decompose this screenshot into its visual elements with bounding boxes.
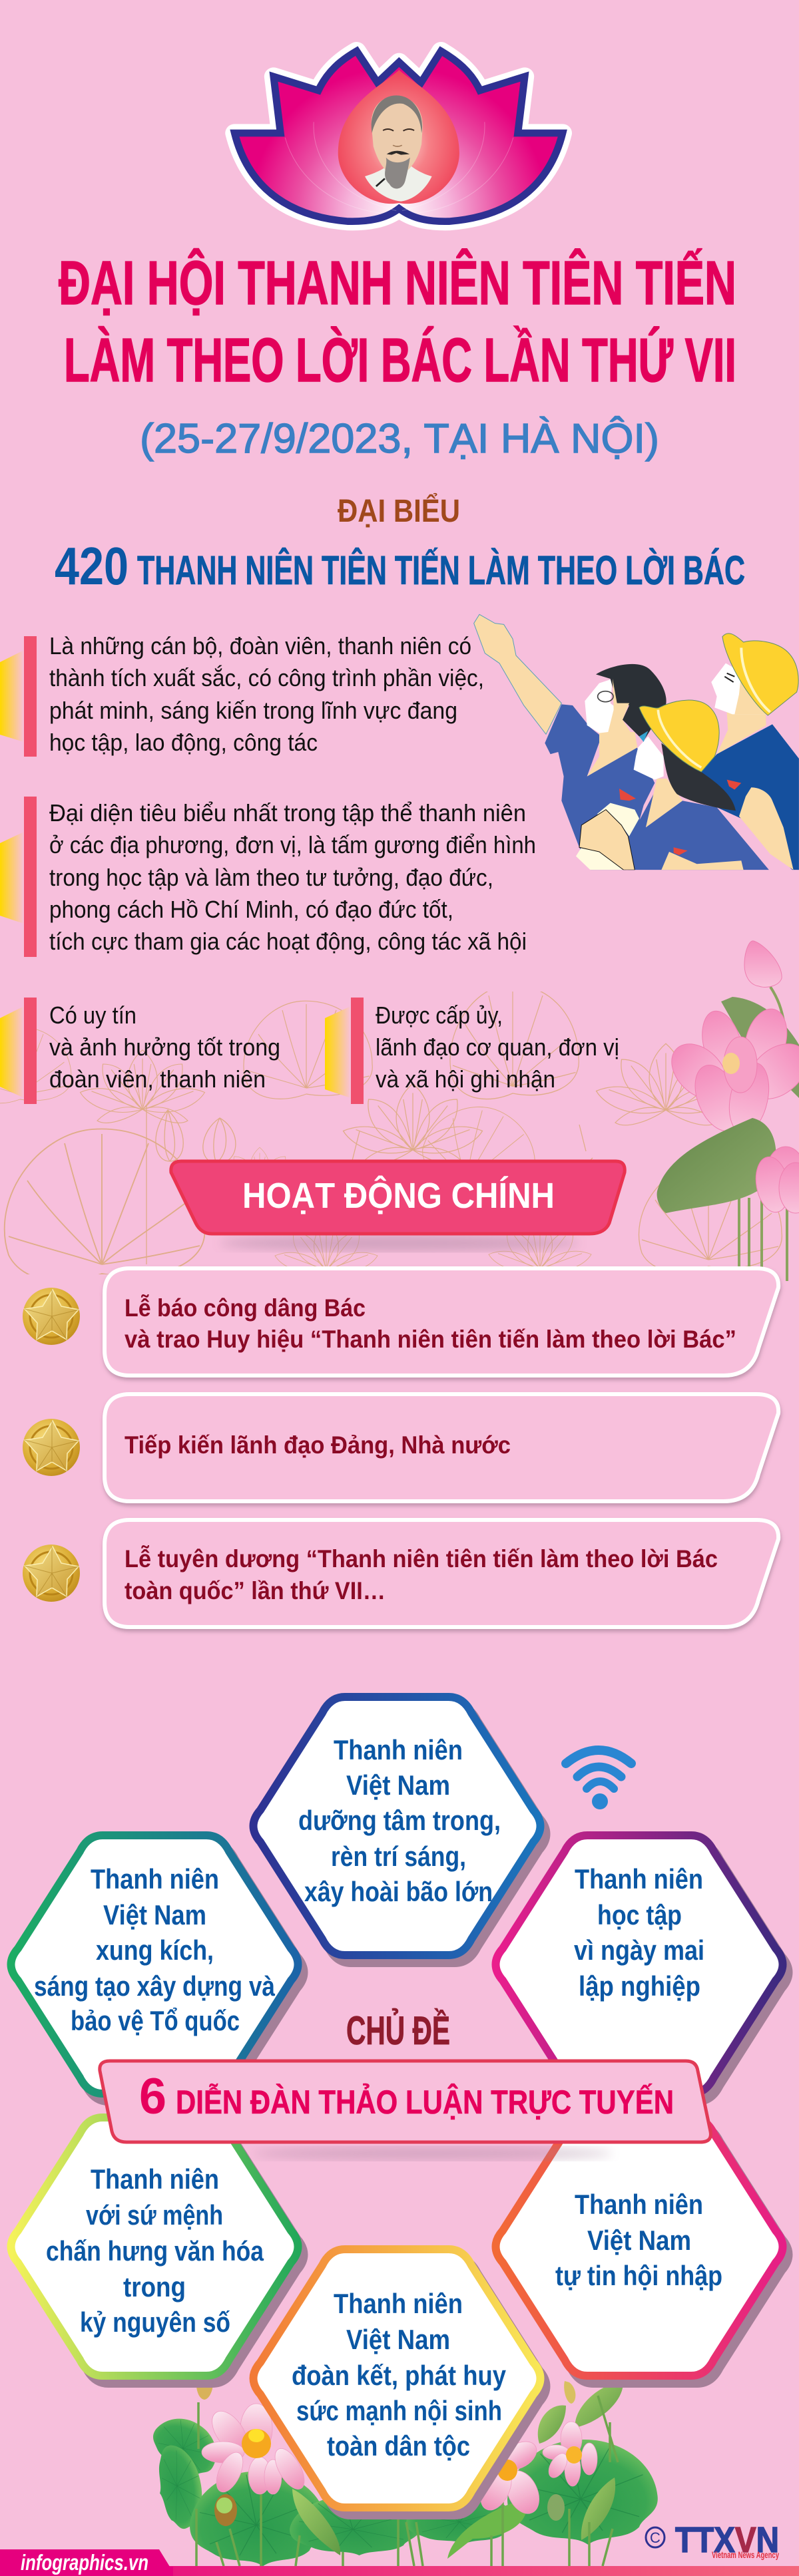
criterion 3: và ảnh hưởng tốt trong	[49, 1033, 280, 1061]
right flower behind	[475, 2436, 545, 2519]
stems right	[739, 987, 787, 1281]
forum text: bottom: sức mạnh nội sinh	[296, 2395, 502, 2426]
forum text: top: dưỡng tâm trong,	[298, 1805, 501, 1836]
lotus flowers right	[657, 941, 799, 1281]
ribbon shadow	[220, 1235, 579, 1251]
banner: six forums: 6	[139, 2068, 166, 2125]
criterion 1: học tập, lao động, công tác	[49, 729, 318, 756]
forum text: top: rèn trí sáng,	[331, 1841, 466, 1872]
large flower	[661, 1004, 799, 1137]
criterion 3: Có uy tín	[49, 1002, 136, 1029]
illustration: three young workers	[474, 614, 799, 870]
criterion 3	[0, 998, 280, 1104]
forum text: right: học tập	[597, 1899, 682, 1931]
activity 2: Tiếp kiến lãnh đạo Đảng, Nhà nước	[125, 1431, 511, 1459]
criterion 3: đoàn viên, thanh niên	[49, 1065, 266, 1093]
forum text: left: sáng tạo xây dựng và	[34, 1970, 276, 2002]
footer tab: infographics.vn: infographics.vn	[21, 2550, 148, 2575]
criterion 4: và xã hội ghi nhận	[376, 1065, 555, 1093]
section ribbon: main activities	[171, 1161, 625, 1251]
date and place: (25-27/9/2023, TẠI HÀ NỘI)	[140, 416, 659, 462]
forum text: right: Thanh niên	[575, 1863, 703, 1895]
forum text: left: Thanh niên	[91, 1863, 219, 1895]
banner shadow	[253, 2147, 613, 2160]
hexagon forum: top	[253, 1697, 546, 1963]
activity 3	[23, 1520, 778, 1627]
buds	[196, 2376, 213, 2400]
small flower centre	[566, 2446, 582, 2464]
copyright mark: C	[650, 2529, 661, 2546]
forum text: lower right: tự tin hội nhập	[555, 2260, 722, 2291]
rolled leaves	[292, 2489, 340, 2555]
criterion 2: phong cách Hồ Chí Minh, có đạo đức tốt,	[49, 896, 453, 923]
criterion 2	[0, 797, 536, 957]
forum text: lower left: với sứ mệnh	[86, 2199, 223, 2231]
stems	[196, 2396, 618, 2566]
activity 1: Lễ báo công dâng Bác	[125, 1294, 366, 1322]
activity 1	[23, 1268, 778, 1376]
small flower	[543, 2422, 597, 2486]
title	[59, 248, 736, 395]
flower centre	[722, 1053, 740, 1074]
criterion 1: phát minh, sáng kiến trong lĩnh vực đang	[49, 697, 457, 724]
criterion 1: thành tích xuất sắc, có công trình phần việc,	[49, 664, 484, 691]
forum text: bottom: Việt Nam	[346, 2324, 450, 2355]
activity 1: và trao Huy hiệu “Thanh niên tiên tiến làm theo lời Bác”	[125, 1326, 736, 1353]
criterion 4: Được cấp ủy,	[376, 1002, 503, 1029]
bottom lotus plants	[144, 2376, 658, 2566]
logo: TTXVN: TTXVN	[675, 2520, 779, 2560]
forum text: bottom: toàn dân tộc	[327, 2430, 470, 2462]
activity 3: toàn quốc” lần thứ VII…	[125, 1577, 386, 1604]
forum text: left: xung kích,	[96, 1934, 214, 1966]
delegates count: 420	[55, 536, 129, 596]
panel: activity list	[23, 1268, 778, 1627]
forum text: right: vì ngày mai	[574, 1934, 704, 1966]
criterion 2: Đại diện tiêu biểu nhất trong tập thể thanh niên	[49, 799, 526, 827]
forum text: bottom: đoàn kết, phát huy	[292, 2360, 507, 2391]
criterion 4	[325, 998, 619, 1104]
forum text: top: xây hoài bão lớn	[304, 1876, 493, 1907]
criterion 2: tích cực tham gia các hoạt động, công tác xã hội	[49, 928, 527, 955]
big leaf	[657, 1118, 776, 1213]
lower flower	[752, 1147, 799, 1215]
fold leaf	[447, 2499, 527, 2559]
criterion 1	[0, 632, 484, 757]
left pink flower	[202, 2404, 310, 2496]
forum text: top: Việt Nam	[346, 1769, 450, 1801]
criterion 1: Là những cán bộ, đoàn viên, thanh niên có	[49, 632, 471, 659]
hexagon forum: lower left	[11, 2117, 304, 2384]
banner: six forums: DIỄN ĐÀN THẢO LUẬN TRỰC TUYẾN	[176, 2084, 674, 2121]
background line-art lotus	[0, 985, 782, 1281]
forum text: lower left: Thanh niên	[91, 2163, 219, 2195]
delegates label: ĐẠI BIỂU	[338, 493, 460, 529]
forum text: lower right: Thanh niên	[575, 2189, 703, 2220]
activity 3: Lễ tuyên dương “Thanh niên tiên tiến làm theo lời Bác	[125, 1545, 718, 1572]
criterion 4: lãnh đạo cơ quan, đơn vị	[376, 1033, 619, 1061]
forum text: lower left	[46, 2163, 264, 2338]
emblem: lotus with portrait	[234, 51, 563, 222]
theme heading: CHỦ ĐỀ	[346, 2008, 450, 2053]
upper leaf	[721, 997, 799, 1098]
hexagon forum: bottom	[253, 2249, 546, 2515]
hexagon forum: right	[495, 1835, 788, 2102]
icon: wifi	[566, 1750, 631, 1809]
forum text: lower left: trong	[123, 2271, 186, 2302]
bud	[744, 941, 782, 988]
forum text: lower left: kỷ nguyên số	[80, 2306, 230, 2338]
forum text: top: Thanh niên	[334, 1734, 463, 1765]
panel: delegate criteria	[0, 632, 619, 1104]
forum text: left: bảo vệ Tổ quốc	[71, 2005, 240, 2036]
forum text: bottom	[292, 2288, 507, 2462]
footer strip	[0, 2566, 799, 2576]
hexagon forum: left	[11, 1835, 304, 2102]
forum text: right	[574, 1863, 704, 2002]
section ribbon: main activities: HOẠT ĐỘNG CHÍNH	[242, 1175, 555, 1216]
leaves	[144, 2406, 658, 2566]
delegates count	[55, 536, 745, 596]
forum text: right: lập nghiệp	[579, 1970, 700, 2002]
forum text: bottom: Thanh niên	[334, 2288, 463, 2319]
forum text: top	[298, 1734, 501, 1907]
left flower centre	[242, 2429, 271, 2458]
panel: six online forums	[11, 1697, 788, 2515]
forum text: lower right	[555, 2189, 722, 2291]
criterion 2: trong học tập và làm theo tư tưởng, đạo đức,	[49, 864, 493, 891]
forum text: lower right: Việt Nam	[587, 2225, 691, 2256]
forum text: left: Việt Nam	[103, 1899, 206, 1931]
criterion 2: ở các địa phương, đơn vị, là tấm gương điển hình	[49, 831, 536, 858]
right flower centre	[497, 2460, 517, 2481]
banner: six forums	[100, 2061, 710, 2142]
activity 2	[23, 1394, 778, 1501]
forum text: lower left: chấn hưng văn hóa	[46, 2235, 264, 2267]
forum text: left	[34, 1863, 276, 2036]
copyright mark	[646, 2527, 665, 2547]
hexagon forum: lower right	[495, 2117, 788, 2384]
